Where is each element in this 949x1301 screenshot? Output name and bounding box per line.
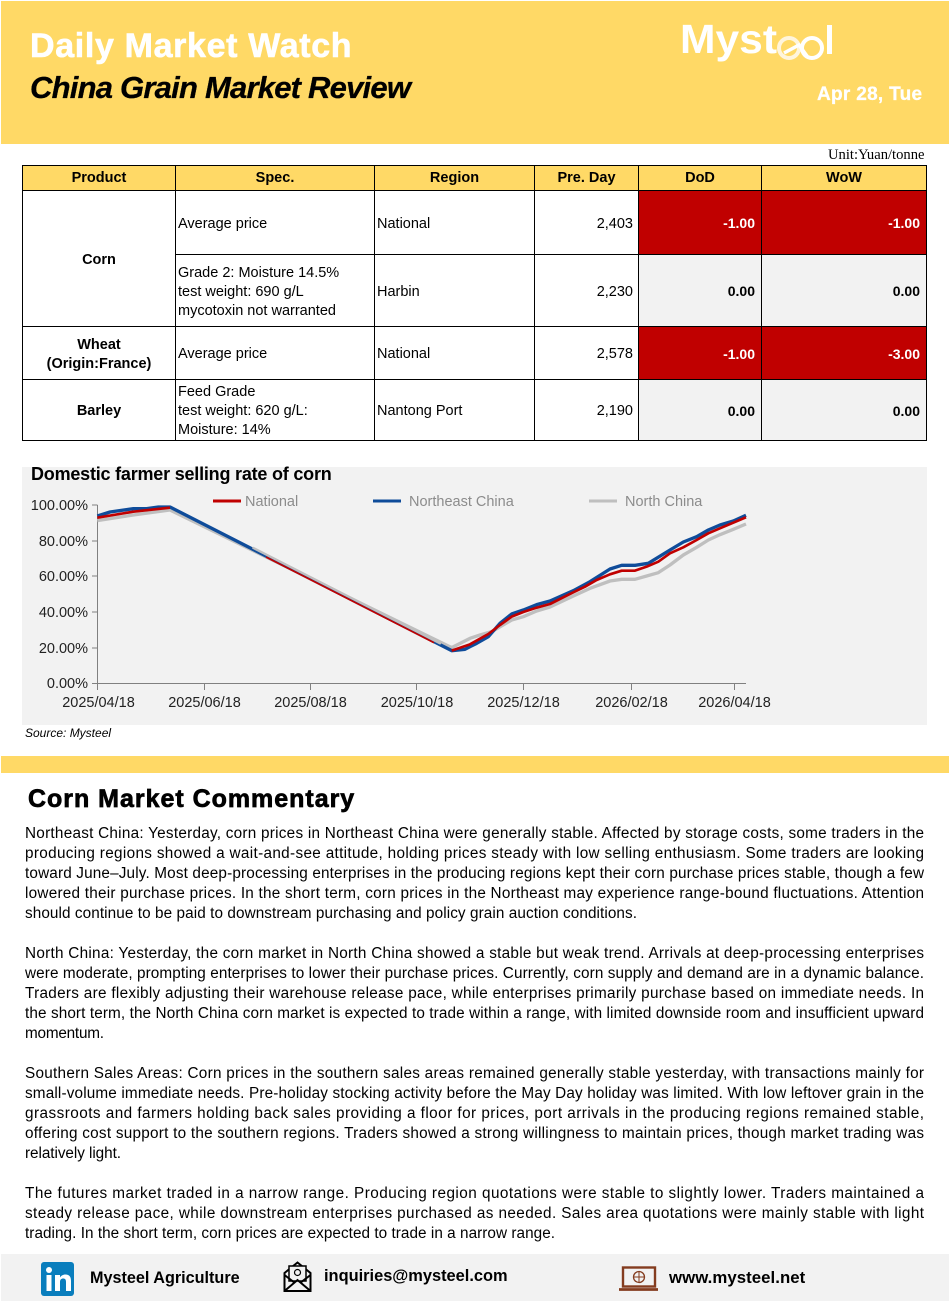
footer text: email: inquiries@mysteel.com (324, 1267, 508, 1285)
row: barley: Moisture: 14% (178, 422, 271, 438)
subtitle: China Grain Market Review: China Grain Market Review (30, 70, 410, 105)
paragraph: Southern Sales Areas: offering cost support to the southern regions. Traders showed a strong willingness to maintain prices, though market trading was (25, 1125, 924, 1142)
legend (213, 494, 703, 510)
row: corn average price: 2,403 (597, 216, 633, 232)
series: National (97, 508, 746, 651)
table header row: Region (430, 170, 479, 186)
series: National on the falling section (267, 557, 433, 642)
price table (22, 165, 927, 441)
y axis labels: 20.00% (39, 641, 88, 657)
legend: National (245, 494, 298, 510)
paragraph: Northeast China: producing regions showed a wait-and-see attitude, holding prices steady with low selling enthusiasm. Some traders are looking (25, 845, 924, 862)
panel: corn selling rate chart (22, 467, 927, 725)
footer text: website: www.mysteel.net (669, 1268, 805, 1287)
paragraph: Southern Sales Areas: relatively light. (25, 1145, 121, 1162)
paragraph: North China: Traders are flexibly adjusting their warehouse release pace, while enterprises primarily purchase based on immediate needs. In (25, 985, 924, 1002)
series lines (97, 507, 746, 651)
paragraph: North China: were moderate, prompting enterprises to lower their purchase prices. Currently, corn supply and demand are in a dynamic balance. (24, 965, 924, 982)
table header row: Pre. Day (557, 170, 616, 186)
table header row: Product (72, 170, 126, 186)
paragraph: North China: North China: Yesterday, the corn market in North China showed a stable but weak trend. Arrivals at deep-processing enterprises (25, 945, 924, 962)
paragraph: North China: momentum. (25, 1025, 104, 1042)
row: barley: Feed Grade (178, 384, 255, 400)
source note: Source: Mysteel (25, 726, 111, 740)
x axis labels: 2026/04/18 (698, 695, 771, 711)
x axis labels: 2025/12/18 (487, 695, 560, 711)
row: barley: 0.00 (893, 402, 920, 418)
paragraph: Northeast China: toward June–July. Most deep-processing enterprises in the producing regions kept their corn purchase prices stable, though a few (25, 865, 925, 882)
paragraph: Southern Sales Areas: Southern Sales Areas: Corn prices in the southern sales areas remained generally stable yesterday, with transactions mainly for (25, 1065, 924, 1082)
row: wheat: Wheat (77, 336, 121, 352)
row: corn average price: Average price (178, 216, 267, 232)
paragraph: Southern Sales Areas: grassroots and farmers holding back sales providing a floor for prices, port arrivals in the producing regions remained stable, (25, 1105, 924, 1122)
y axis labels: 0.00% (47, 676, 88, 692)
x axis labels: 2025/08/18 (274, 695, 347, 711)
row: barley: test weight: 620 g/L: (178, 403, 308, 419)
row: wheat: Average price (178, 346, 267, 362)
paragraph: Northeast China: Northeast China: Yesterday, corn prices in Northeast China were generally stable. Affected by storage costs, some traders in the (25, 825, 924, 842)
footer text: LinkedIn name: Mysteel Agriculture (90, 1269, 240, 1287)
paragraph: futures market: steady release pace, while downstream enterprises purchased as needed. Sales area quotations were mainly stable with light (25, 1205, 925, 1222)
series: North China overlay on the falling section (253, 548, 440, 643)
row: corn Harbin: test weight: 690 g/L (178, 284, 304, 300)
paragraph: futures market: trading. In the short term, corn prices are expected to trade in a narrow range. (25, 1225, 555, 1242)
line chart (31, 494, 771, 711)
table header row: WoW (826, 170, 862, 186)
paragraph: Northeast China (25, 825, 925, 922)
icon: email envelope (284, 1261, 312, 1292)
row: corn Harbin: Harbin (377, 284, 420, 300)
table header row: Corn (82, 252, 116, 268)
table header row: Spec. (256, 170, 294, 186)
row: barley: Nantong Port (377, 403, 462, 419)
paragraph: Northeast China: lowered their purchase prices. In the short term, corn prices in the Northeast may experience range-bound fluctuations. Attention (25, 885, 924, 902)
row: wheat: -1.00 (723, 346, 755, 362)
y axis labels: 60.00% (39, 569, 88, 585)
row: wheat (47, 327, 926, 379)
y axis labels: 100.00% (31, 498, 88, 514)
commentary text (24, 825, 925, 1242)
chart title: Domestic farmer selling rate of corn (31, 464, 332, 484)
title: Daily Market Watch: Daily Market Watch (30, 27, 352, 65)
logo: Mysteel: Myst (680, 16, 777, 62)
row: wheat: (Origin:France) (47, 356, 151, 372)
row: corn Harbin: mycotoxin not warranted (178, 302, 336, 318)
paragraph: Northeast China: should continue to be paid to downstream purchasing and policy grain auction conditions. (25, 905, 637, 922)
paragraph: Southern Sales Areas (25, 1065, 924, 1162)
legend: Northeast China (409, 494, 515, 510)
logo: Mysteel (680, 16, 832, 62)
x axis labels: 2026/02/18 (595, 695, 668, 711)
table header row: DoD (685, 170, 715, 186)
row: corn Harbin: 0.00 (728, 283, 755, 299)
y axis labels: 40.00% (39, 605, 88, 621)
x axis labels: 2025/06/18 (168, 695, 241, 711)
row: wheat: National (377, 346, 430, 362)
date: Apr 28, Tue (817, 84, 922, 105)
paragraph: futures market: The futures market traded in a narrow range. Producing region quotations were stable to slightly lower. Traders maintained a (25, 1185, 924, 1202)
row: corn average price: -1.00 (723, 215, 755, 231)
y axis labels (31, 498, 88, 692)
row: corn Harbin: 0.00 (893, 283, 920, 299)
icon: LinkedIn (41, 1262, 74, 1296)
series: Northeast China (97, 507, 746, 651)
paragraph: Southern Sales Areas: small-volume immediate needs. Pre-holiday stocking activity before the May Day holiday was limited. With low leftover grain in the (25, 1085, 924, 1102)
y axis labels: 80.00% (39, 534, 88, 550)
row: corn average price: -1.00 (888, 215, 920, 231)
paragraph: futures market (25, 1185, 925, 1242)
row: wheat: 2,578 (597, 346, 633, 362)
series: North China (97, 510, 746, 648)
heading: Corn Market Commentary: Corn Market Commentary (28, 785, 355, 813)
row: corn Harbin: Grade 2: Moisture 14.5% (178, 264, 339, 280)
x axis labels: 2025/10/18 (381, 695, 453, 711)
icon: laptop with globe (619, 1266, 658, 1291)
y axis (92, 505, 746, 690)
x axis labels: 2025/04/18 (62, 695, 135, 711)
legend: North China (625, 494, 703, 510)
paragraph: North China (24, 945, 924, 1042)
row: barley: 2,190 (597, 403, 633, 419)
row: barley: Barley (77, 403, 121, 419)
unit label: Unit:Yuan/tonne (828, 147, 924, 163)
row: corn Harbin (178, 255, 926, 326)
row: corn average price: National (377, 216, 430, 232)
footer bar (1, 1254, 949, 1301)
x axis labels (62, 695, 771, 711)
section divider band (1, 756, 949, 773)
table header row (23, 166, 926, 440)
row: wheat: -3.00 (888, 346, 920, 362)
paragraph: North China: the short term, the North China corn market is expected to trade within a range, with limited downside room and insufficient upward (25, 1005, 924, 1022)
row: corn average price (82, 191, 926, 268)
row: corn Harbin: 2,230 (597, 284, 633, 300)
header banner (1, 1, 949, 144)
row: barley: 0.00 (728, 402, 755, 418)
row: barley (77, 380, 926, 440)
